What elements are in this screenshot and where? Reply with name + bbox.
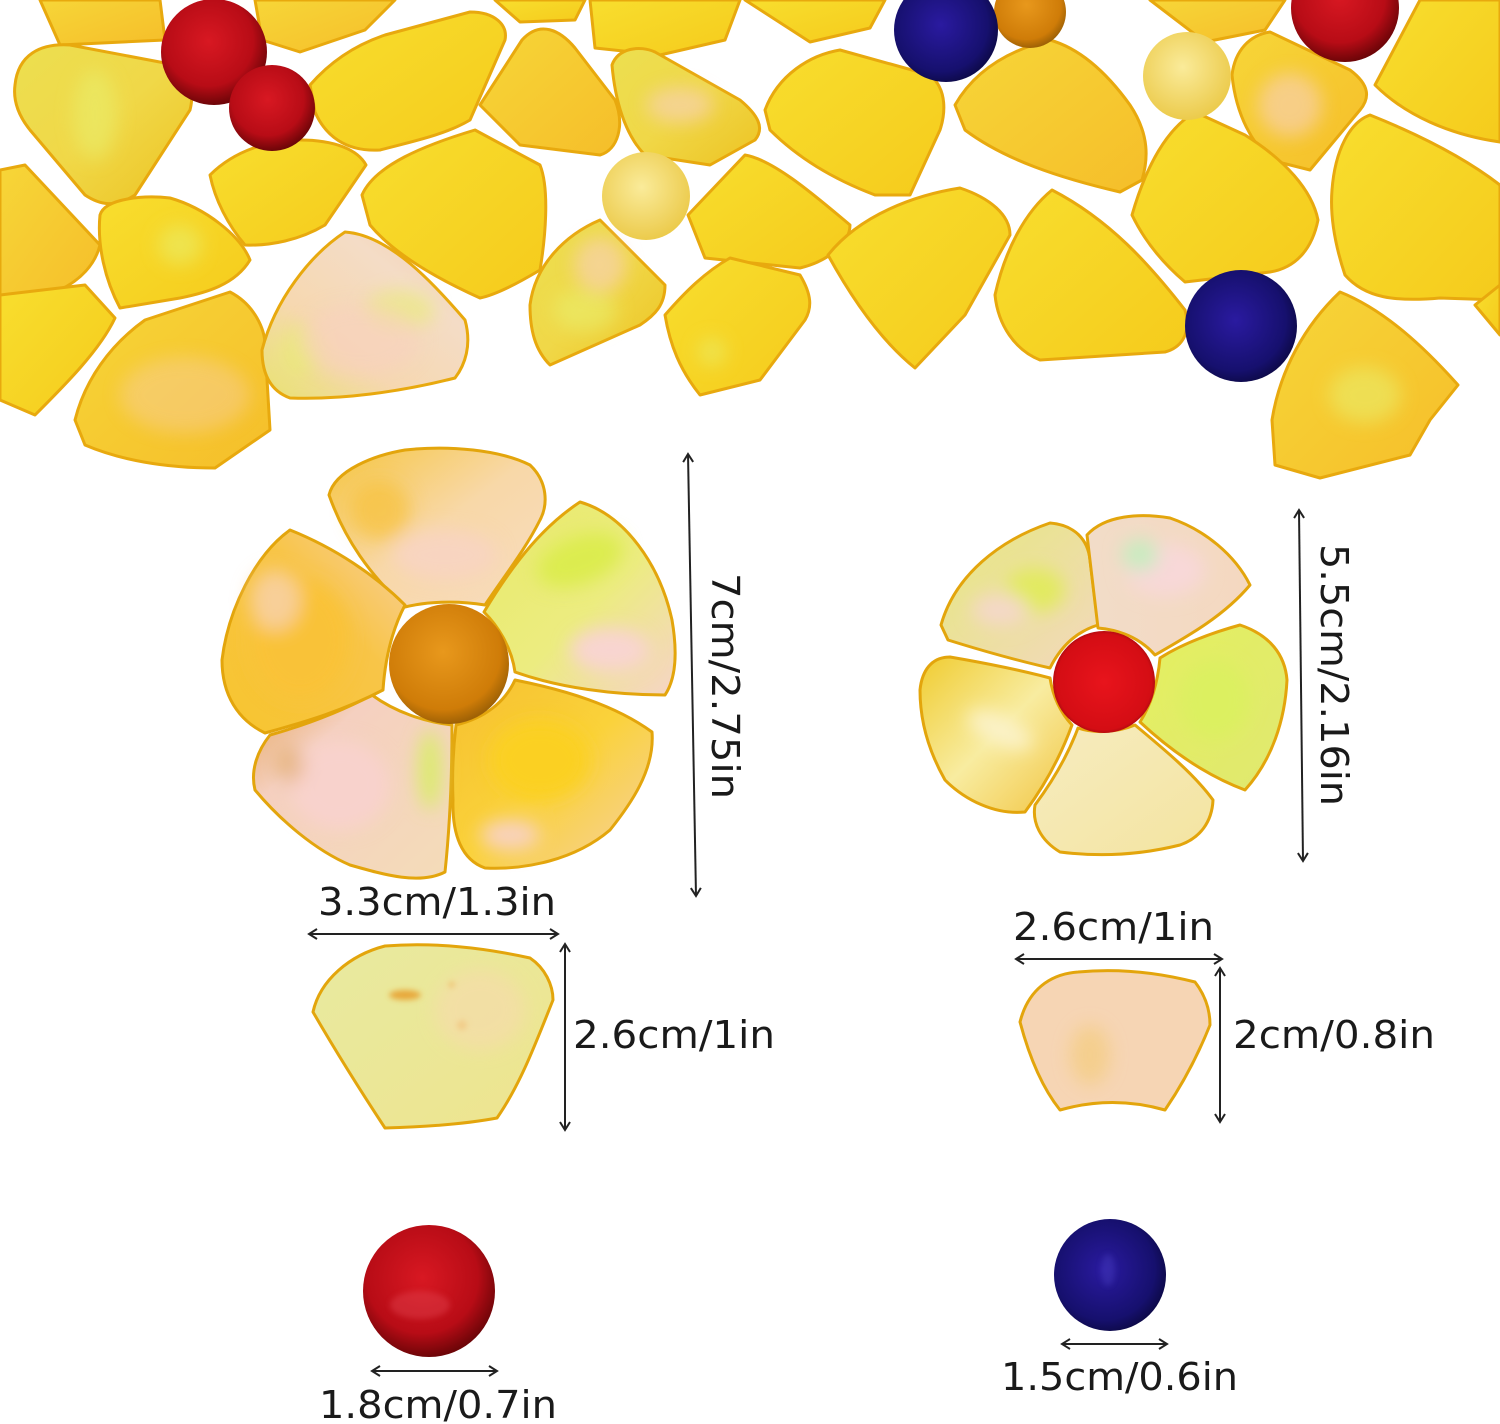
petal: lower left (253, 695, 452, 878)
glass beads in pile (161, 0, 1399, 382)
dimension: large flower height (688, 454, 747, 896)
dimension: large petal width: 3.3cm/1.3in (318, 880, 556, 924)
dimension: small petal height: 2cm/0.8in (1233, 1013, 1435, 1057)
speckles (389, 982, 467, 1030)
dimension: large flower height: 7cm/2.75in (703, 573, 747, 799)
dimension: blue bead: 1.5cm/0.6in (1001, 1355, 1238, 1399)
petal: left (920, 657, 1072, 812)
petal: right (484, 502, 675, 695)
dimension: large petal height: 2.6cm/1in (573, 1013, 775, 1057)
bead: red (363, 1225, 495, 1357)
petal: left (222, 530, 405, 733)
dimension: small petal width: 2.6cm/1in (1013, 905, 1214, 949)
dimension: small flower height (1299, 510, 1356, 861)
centre bead (389, 604, 509, 724)
petal: right (1140, 625, 1287, 790)
iridescent blotches (250, 480, 650, 851)
dimension: small flower height: 5.5cm/2.16in (1312, 544, 1356, 806)
petal: top (329, 448, 545, 607)
pile of yellow glass pieces (0, 0, 1500, 478)
small flower (920, 516, 1287, 855)
iridescent blotches (962, 539, 1250, 757)
petal: bottom (1034, 725, 1213, 855)
petal: lower right (453, 680, 652, 868)
bead: blue (1054, 1219, 1166, 1331)
single petal: large (313, 945, 553, 1128)
large flower (222, 448, 675, 878)
petal: upper left (941, 523, 1098, 668)
single petal: small (1020, 971, 1210, 1110)
iridescent highlights on pile (73, 70, 1401, 423)
petal: upper right (1087, 516, 1250, 655)
centre bead (1053, 631, 1155, 733)
